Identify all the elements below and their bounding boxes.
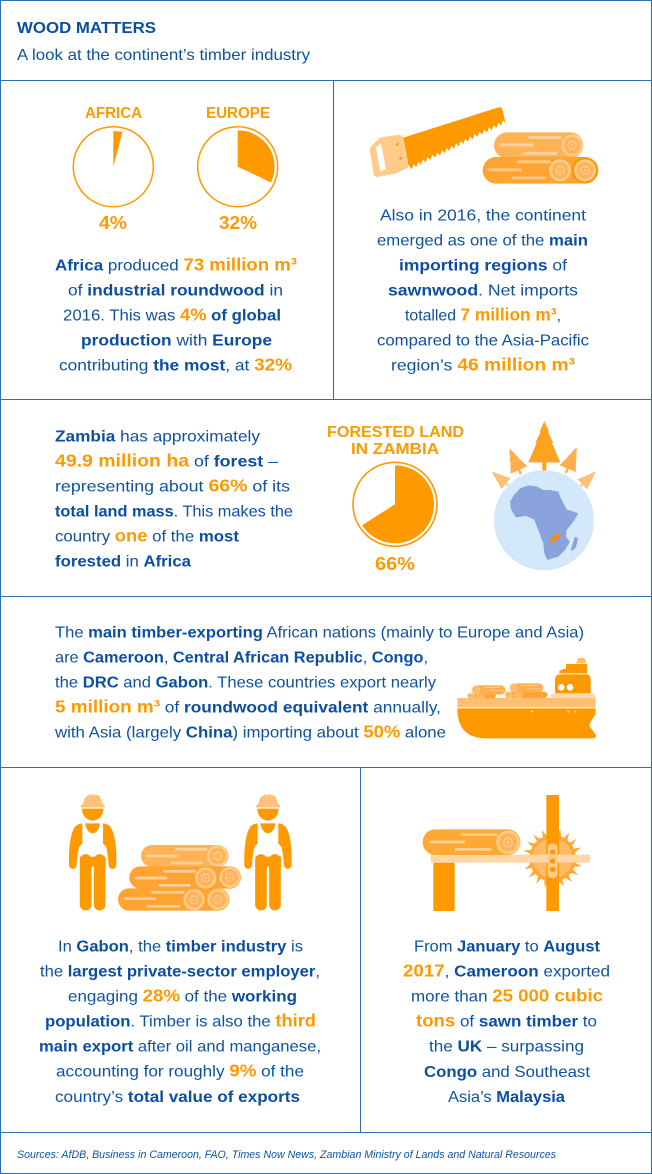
panel: Cameroon exports [403,795,610,1106]
text block: Cameroon exports: the UK – surpassing [429,1038,584,1056]
icon: globe with trees and Africa map [487,421,601,570]
text block: Cameroon exports: more than 25 000 cubic [411,986,603,1006]
text block: Cameroon exports: tons of sawn timber to [416,1010,597,1030]
panel: sawnwood imports [370,107,598,375]
icon: workers and log pile [69,794,292,911]
text block: Zambia forest [55,428,293,570]
text block: Cameroon exports: From January to August [414,938,601,956]
text block: Gabon employment: country’s total value of exports [55,1089,300,1106]
text block: Cameroon exports: Asia’s Malaysia [448,1089,565,1106]
value: 4%: 4% [99,213,127,233]
text block: Cameroon exports: Congo and Southeast [424,1064,591,1081]
text block: sawnwood imports: Also in 2016, the continent [380,208,587,224]
text block: Gabon employment: accounting for roughly 9% of the [56,1060,304,1080]
panel: Gabon employment [39,794,321,1106]
text block: Zambia forest: representing about 66% of its [55,476,290,496]
text block: Cameroon exports: 2017, Cameroon exported [403,960,610,980]
text block: Gabon employment: In Gabon, the timber industry is [58,938,303,956]
icon: cargo ship with logs [457,658,596,738]
text block: Africa production: 2016. This was 4% of global [63,304,281,324]
value: 32%: 32% [219,213,257,233]
icon: right worker [244,794,292,905]
label: Africa: AFRICA [85,105,142,122]
label: forested land in Zambia: IN ZAMBIA [351,441,439,458]
text block: Gabon employment: main export after oil and manganese, [39,1038,321,1056]
text block: sawnwood imports: importing regions of [399,258,568,274]
text block: Gabon employment: the largest private-sector employer , [40,964,320,980]
text block: Africa production: of industrial roundwood in [68,282,283,300]
subtitle: A look at the continent’s timber industry [17,47,310,64]
panel: global roundwood production [55,105,297,374]
icon: left worker [69,794,116,905]
label: forested land in Zambia [327,424,464,458]
text block: sawnwood imports [377,208,589,374]
text block: Zambia forest: total land mass. This makes the [55,504,293,520]
text block: timber exporters [54,624,584,742]
icon: sawmill [423,795,590,911]
text block: Zambia forest: country one of the most [55,526,240,546]
pie chart: Africa 4% [73,127,153,207]
sources footnote: Sources: AfDB, Business in Cameroon, FAO, Times Now News, Zambian Ministry of Lands and Natural Resources [17,1149,556,1161]
pie chart: Zambia 66% [353,462,437,546]
text block: timber exporters: the DRC and Gabon. These countries export nearly [55,674,436,692]
icon: saw and logs [370,107,598,184]
icon: log pile [118,845,241,911]
text block: Gabon employment: engaging 28% of the working [68,986,297,1006]
text block: timber exporters: are Cameroon, Central African Republic, Congo, [55,650,428,666]
text block: timber exporters: The main timber-exporting African nations (mainly to Europe and Asia) [55,624,584,642]
title [17,20,310,64]
pie chart: Europe 32% [198,127,278,207]
text block: Africa production: contributing the most , at 32% [59,354,292,374]
text block: Zambia forest: Zambia has approximately [55,428,260,446]
text block: timber exporters: with Asia (largely China) importing about 50% alone [54,722,446,742]
text block: timber exporters: 5 million m³ of roundwood equivalent annually, [55,696,441,716]
text block: sawnwood imports: region’s 46 million m³ [391,354,575,374]
label: forested land in Zambia: FORESTED LAND [327,424,464,441]
text block: Zambia forest: forested in Africa [55,554,191,570]
text block: sawnwood imports: compared to the Asia-Pacific [377,332,589,350]
text block: Africa production [55,254,297,374]
label: Europe: EUROPE [206,105,270,122]
text block: Africa production: Africa produced 73 million m³ [55,254,297,274]
text block: Africa production: production with Europe [81,332,272,350]
value: 66%: 66% [375,554,415,574]
panel: Zambia forest [55,421,601,574]
text block: sawnwood imports: totalled 7 million m³, [405,304,561,324]
panel: timber exporters [54,624,596,742]
text block: sawnwood imports: emerged as one of the main [377,232,588,250]
text block: Gabon employment: population. Timber is also the third [45,1010,316,1030]
text block: Cameroon exports [403,938,610,1106]
heading: wood matters: WOOD MATTERS [17,20,156,37]
text block: sawnwood imports: sawnwood . Net imports [388,282,578,300]
text block: Gabon employment [39,938,321,1106]
text block: Zambia forest: 49.9 million ha of forest – [55,450,278,470]
